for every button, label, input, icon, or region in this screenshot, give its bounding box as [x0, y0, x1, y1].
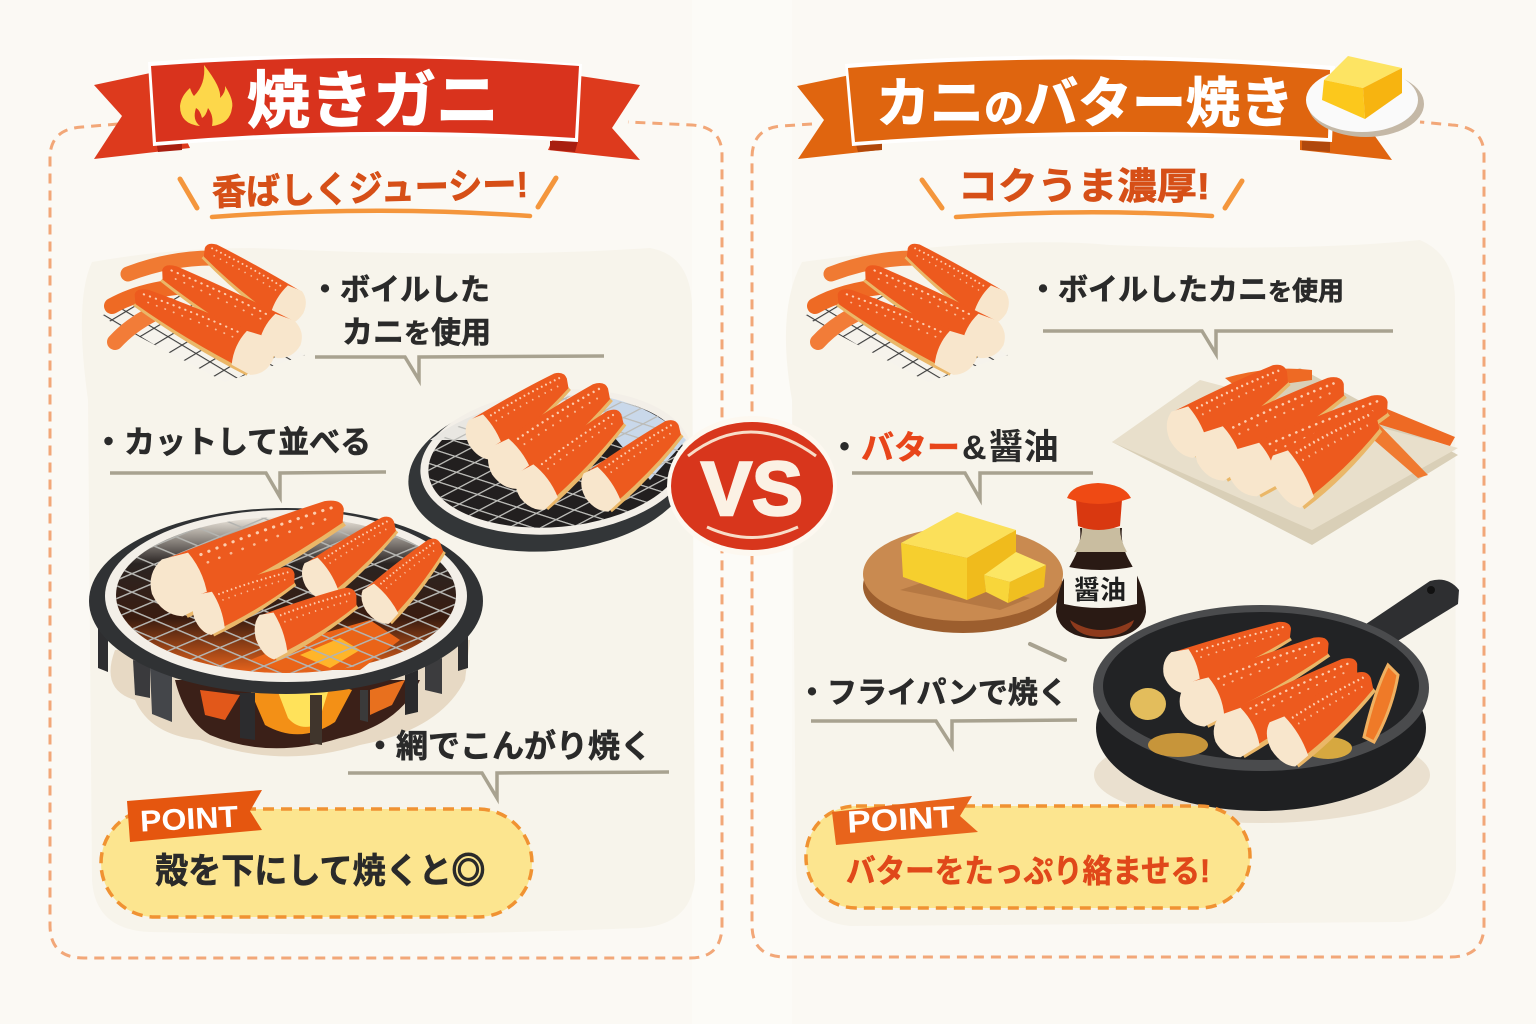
callout: カットして並べる: ・カットして並べる — [93, 425, 371, 460]
illustration: soy sauce bottle — [1056, 483, 1146, 639]
panel: grilled crab frame — [50, 122, 722, 958]
callout: 網でこんがり焼く: ・網でこんがり焼く — [364, 728, 652, 764]
illustration: crab legs on wooden board — [1112, 360, 1458, 545]
connector stroke — [1030, 644, 1065, 660]
point box: grilled crab — [101, 790, 532, 917]
bottle label: 醤油 — [1074, 575, 1126, 605]
illustration: cut crab legs on small grill — [402, 368, 698, 563]
panel: grilled crab wash — [82, 248, 695, 934]
POINT tag: POINT — [846, 799, 956, 840]
subheading: 香ばしくジューシー!: 香ばしくジューシー! — [211, 164, 528, 213]
subheading: コクうま濃厚!: コクうま濃厚! — [958, 166, 1210, 207]
callout: フライパンで焼く — [797, 677, 1077, 746]
illustration: frying pan with crab legs — [1093, 580, 1459, 823]
point text: バターをたっぷり絡ませる! — [846, 853, 1210, 889]
illustration: boiled crab legs on net, left — [100, 240, 312, 382]
callout: 網でこんがり焼く — [348, 728, 669, 798]
callout: ボイルしたカニを使用 left: ・ボイルした — [310, 274, 490, 307]
point box: butter crab — [806, 796, 1250, 908]
ribbon tail left — [94, 72, 190, 159]
ribbon tail right — [1300, 110, 1392, 160]
VS text: VS — [701, 447, 803, 532]
callout: ボイルしたカニを使用 right — [1028, 274, 1393, 354]
ribbon tail left — [797, 74, 880, 159]
callout: バター&醤油 — [828, 428, 1093, 499]
illustration: boiled crab legs on net, right — [803, 240, 1015, 382]
callout: フライパンで焼く: ・フライパンで焼く — [797, 677, 1068, 710]
title: カニのバター焼き: カニのバター焼き — [876, 74, 1294, 134]
callout: ボイルしたカニを使用 right: ・ボイルしたカニを使用 — [1028, 274, 1344, 307]
callout: ボイルしたカニを使用 left — [310, 274, 604, 380]
ribbon tail right — [548, 76, 640, 160]
icon: flame — [180, 65, 232, 126]
POINT tag — [127, 790, 262, 842]
ribbon: grilled crab title — [94, 54, 640, 160]
panel: butter crab frame — [752, 122, 1484, 957]
POINT tag — [832, 796, 978, 845]
callout: カットして並べる — [93, 425, 386, 497]
point text: 殻を下にして焼くと◎ — [155, 852, 485, 891]
illustration: charcoal grill with fire and crab legs — [89, 495, 483, 756]
panel: butter crab wash — [786, 240, 1456, 926]
POINT tag: POINT — [139, 801, 239, 839]
VS badge — [667, 416, 837, 556]
subheading: コクうま濃厚! — [922, 166, 1242, 217]
title: 焼きガニ: 焼きガニ — [247, 67, 499, 136]
illustration: butter on round cutting board — [863, 512, 1063, 633]
callout: ボイルしたカニを使用 left: カニを使用 — [342, 315, 491, 350]
icon: butter on plate — [1306, 56, 1424, 137]
callout: バター&醤油: ・バター&醤油 — [828, 428, 1059, 467]
ribbon: butter crab title — [797, 55, 1424, 160]
